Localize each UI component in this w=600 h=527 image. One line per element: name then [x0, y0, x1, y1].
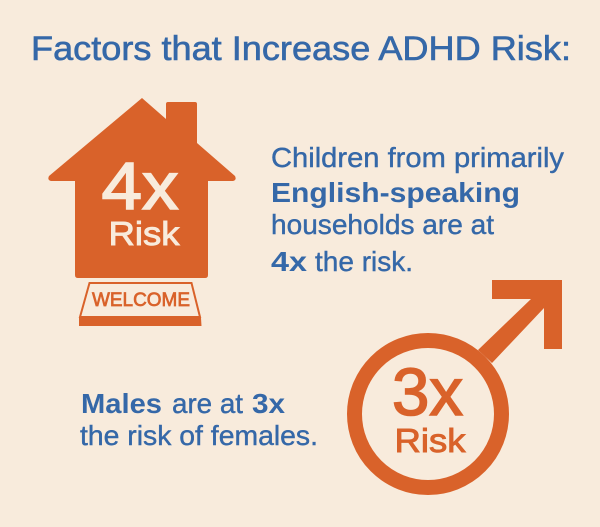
welcome mat	[79, 283, 202, 326]
text block: English-speaking households: the risk.	[315, 246, 413, 277]
text block: males risk: 3x	[252, 388, 286, 419]
house shape	[48, 98, 236, 278]
ring label: 3x: 3x	[392, 355, 463, 430]
icon: house with 4x risk	[48, 98, 236, 326]
text block: males risk: the risk of females.	[80, 420, 318, 451]
text block: English-speaking households: 4x	[271, 246, 308, 277]
text block: English-speaking households: households are at	[271, 209, 494, 240]
text block: English-speaking households: English-speaking	[271, 177, 520, 208]
text block: English-speaking households	[271, 142, 564, 277]
male symbol arrow	[478, 280, 562, 363]
text block: English-speaking households: Children from primarily	[271, 142, 564, 173]
text block: males risk	[80, 388, 318, 451]
icon: male symbol with 3x risk	[354, 280, 562, 488]
house label: Risk: Risk	[108, 215, 180, 252]
mat text: WELCOME	[92, 290, 190, 311]
title: Factors that Increase ADHD Risk:	[31, 30, 571, 68]
text block: males risk: Males	[81, 388, 162, 419]
house label: 4x: 4x	[102, 149, 178, 224]
text block: males risk: are at	[172, 388, 243, 419]
ring label: Risk: Risk	[394, 422, 466, 459]
male symbol ring	[354, 340, 502, 488]
